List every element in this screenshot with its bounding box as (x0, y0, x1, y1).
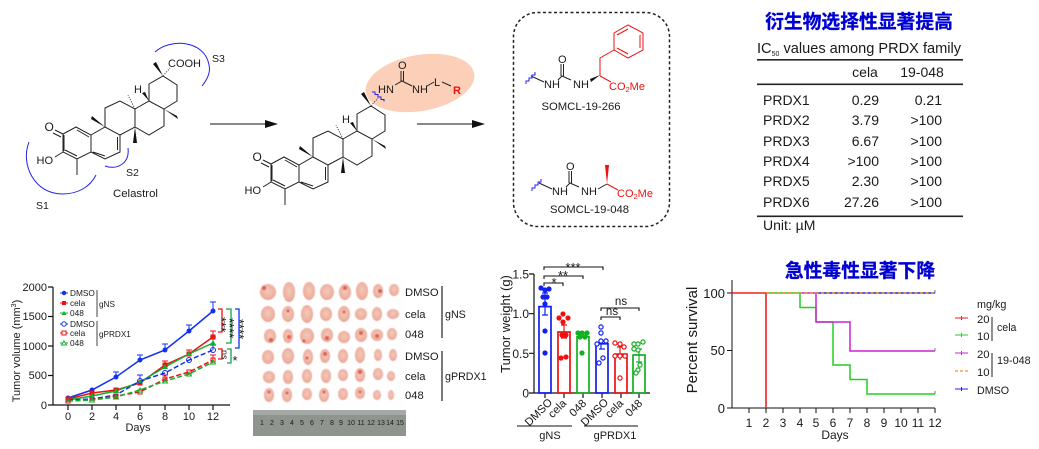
legend: gNS (99, 300, 115, 309)
tumors row: gPRDX1 DMSO (262, 347, 397, 365)
celastrol structure: S2 (126, 167, 139, 179)
tumor volume chart: * (232, 353, 238, 368)
legend: DMSO (977, 385, 1009, 397)
title: acute toxicity: 急性毒性显著下降 (785, 259, 935, 281)
legend: DMSO (70, 288, 95, 298)
IC50 table: cela (852, 64, 878, 80)
table rows: PRDX5 (763, 173, 810, 189)
row labels: DMSO (405, 351, 439, 363)
series lines (68, 311, 213, 398)
unit note: Unit: µM (763, 217, 815, 233)
tumors row: gPRDX1 cela (263, 368, 395, 384)
tumor volume chart: 1000 (23, 341, 47, 353)
tumor weight chart: gPRDX1 (594, 430, 636, 442)
IC50 table: 19-048 (900, 64, 944, 80)
survival chart: 5 (813, 416, 820, 430)
survival chart: 4 (797, 416, 804, 430)
legend: mg/kg (977, 299, 1006, 311)
tumor volume chart: *** (214, 317, 229, 332)
compound SOMCL-19-048: SOMCL-19-048 (550, 204, 629, 216)
ruler: 9 (339, 420, 343, 427)
celastrol structure: S3 (212, 53, 225, 65)
survival chart: Percent survival (684, 287, 701, 393)
category labels: cela (546, 397, 570, 421)
table rows: PRDX6 (763, 194, 810, 210)
row labels: gPRDX1 (445, 371, 487, 383)
row labels: gNS (445, 309, 466, 321)
celastrol structure (26, 43, 225, 212)
tumor surface blotches (262, 286, 382, 394)
category labels: 048 (567, 398, 589, 419)
tumor weight chart: ns (606, 306, 618, 318)
table rows: 6.67 (852, 133, 879, 149)
legend (955, 299, 1031, 397)
celastrol structure: HO (36, 155, 53, 167)
survival chart: 100 (703, 286, 725, 301)
legend: 10 (977, 331, 990, 343)
compound SOMCL-19-266: CO (609, 81, 626, 93)
urea-modified structure: R (453, 85, 461, 97)
legend: 10 (977, 367, 990, 379)
row labels: 048 (405, 329, 424, 341)
table header: values among PRDX family (779, 41, 962, 57)
tumor weight chart: 1.5 (512, 268, 529, 282)
category labels: 048 (623, 398, 645, 419)
tumor volume chart: 3 (11, 303, 18, 307)
legend: DMSO (70, 319, 95, 329)
survival chart: 11 (912, 416, 925, 430)
row labels: cela (405, 309, 426, 321)
tumor weight chart: * (551, 275, 557, 290)
urea-modified structure: O (252, 150, 262, 164)
significance brackets (544, 267, 639, 320)
tumor weight chart: 1.0 (512, 307, 529, 321)
ruler (253, 410, 406, 436)
markers (66, 308, 216, 400)
legend: 20 (977, 314, 990, 326)
tumor weight chart: gNS (539, 430, 561, 442)
celastrol structure: S1 (36, 200, 49, 212)
compound SOMCL-19-266: Me (630, 81, 645, 93)
table rows: 3.79 (852, 112, 879, 128)
tumors row: gNS cela (261, 305, 399, 323)
compound SOMCL-19-048: NH (581, 186, 597, 198)
ruler: 5 (300, 420, 304, 427)
tumor volume chart: 2 (89, 411, 95, 423)
survival curves (766, 293, 935, 394)
category labels: DMSO (579, 396, 611, 429)
significance brackets (218, 309, 239, 363)
compound SOMCL-19-048: 2 (634, 192, 638, 201)
legend: 048 (70, 338, 84, 348)
legend: 20 (977, 349, 990, 361)
ruler: 4 (290, 420, 294, 427)
compound SOMCL-19-048 (532, 161, 653, 216)
table rows: 0.21 (915, 92, 942, 108)
tumor volume chart: ns (220, 350, 230, 360)
ruler: 13 (377, 420, 385, 427)
tumor weight chart: 0.5 (512, 347, 529, 361)
tumor weight chart: Tumor weight (g) (498, 275, 513, 373)
survival chart: 7 (847, 416, 854, 430)
survival chart: 12 (928, 416, 942, 430)
legend (60, 288, 131, 348)
error bars (542, 293, 605, 349)
ruler: 15 (396, 420, 404, 427)
compound SOMCL-19-048: Me (638, 188, 653, 200)
table header: 50 (772, 51, 779, 58)
IC50 table (757, 41, 963, 233)
table rows: 0.29 (852, 92, 879, 108)
row labels (405, 286, 487, 402)
urea-modified structure: L (434, 77, 440, 89)
table rows (763, 92, 942, 210)
compound SOMCL-19-266 (526, 25, 645, 113)
legend: cela (70, 298, 86, 308)
bars (539, 307, 645, 393)
survival chart: 8 (864, 416, 871, 430)
row labels: 048 (405, 390, 424, 402)
survival chart (684, 280, 1031, 442)
table rows: >100 (910, 133, 942, 149)
tumor volume chart: **** (222, 318, 237, 338)
legend: gPRDX1 (99, 330, 131, 339)
tumor volume chart: ) (11, 300, 23, 303)
row labels: DMSO (405, 287, 439, 299)
tumor volume chart: 6 (137, 411, 143, 423)
data points (538, 285, 552, 356)
survival chart: 6 (830, 416, 837, 430)
urea-modified structure: O (398, 60, 407, 72)
urea-modified structure: H (342, 114, 350, 126)
tumor volume chart (11, 282, 247, 434)
compound SOMCL-19-266: NH (544, 79, 560, 91)
compound SOMCL-19-266: SOMCL-19-266 (541, 101, 621, 113)
ruler: 2 (270, 420, 274, 427)
legend: cela (70, 328, 86, 338)
tumors row: gNS 048 (264, 328, 397, 344)
tumor volume chart: 10 (183, 411, 195, 423)
legend: 048 (70, 308, 84, 318)
highlight ellipse (361, 46, 479, 120)
ruler: 3 (280, 420, 284, 427)
table rows: PRDX3 (763, 133, 810, 149)
ruler: 11 (357, 420, 365, 427)
table rows: >100 (910, 153, 942, 169)
tumor volume chart: 0 (65, 411, 71, 423)
compound SOMCL-19-266: 2 (626, 85, 630, 94)
tumor weight chart: 0 (522, 386, 529, 400)
ruler: 14 (386, 420, 394, 427)
table rows: >100 (910, 194, 942, 210)
table rows: >100 (910, 112, 942, 128)
survival chart: 10 (894, 416, 908, 430)
tumor volume chart: 500 (29, 370, 47, 382)
tumor weight chart: ns (615, 296, 627, 308)
tumors row: gPRDX1 048 (264, 387, 394, 402)
celastrol structure: Celastrol (113, 188, 158, 200)
ruler: 10 (347, 420, 355, 427)
tumor volume chart: Tumor volume (mm (11, 307, 23, 402)
arrow 1 (210, 120, 278, 128)
legend: 19-048 (997, 355, 1031, 367)
title: selectivity: 衍生物选择性显著提高 (765, 10, 953, 32)
ruler: 1 (260, 420, 264, 427)
row labels: cela (405, 371, 426, 383)
tumor volume chart: **** (232, 319, 247, 339)
category labels: cela (603, 397, 627, 421)
survival chart: 50 (711, 343, 725, 358)
compound SOMCL-19-266: O (558, 54, 567, 66)
ruler: 7 (320, 420, 324, 427)
compound SOMCL-19-048: NH (552, 186, 568, 198)
table rows: PRDX1 (763, 92, 810, 108)
dashed compound box (514, 12, 670, 226)
tumor weight chart (498, 260, 650, 442)
tumor volume chart: Days (125, 422, 151, 434)
survival chart: 3 (780, 416, 787, 430)
survival chart: 2 (763, 416, 770, 430)
site arcs (26, 43, 209, 194)
table rows: 2.30 (852, 173, 879, 189)
celastrol structure: O (44, 120, 54, 134)
tumor weight chart: ** (558, 268, 568, 283)
table rows: >100 (847, 153, 879, 169)
tumor volume chart: 1500 (23, 311, 47, 323)
compound SOMCL-19-266: NH (573, 79, 589, 91)
urea-modified structure: HN (378, 84, 394, 96)
axes (529, 274, 650, 398)
error bars (113, 302, 216, 377)
tumor volume chart: 2000 (23, 282, 47, 294)
urea-modified structure: NH (412, 84, 428, 96)
survival chart: 9 (881, 416, 888, 430)
survival chart: 0 (718, 401, 725, 416)
tumor volume chart: 8 (162, 411, 168, 423)
table rows: >100 (910, 173, 942, 189)
table header: IC (757, 41, 772, 57)
tumor weight chart: *** (565, 260, 581, 275)
celastrol structure: COOH (168, 58, 201, 70)
arrow 2 (417, 120, 485, 128)
tumors row: gNS DMSO (260, 282, 399, 302)
tumor volume chart: 0 (41, 400, 47, 412)
axes (727, 280, 935, 413)
ruler: 8 (330, 420, 334, 427)
ruler: 12 (367, 420, 375, 427)
axes (48, 287, 230, 410)
tumor volume chart: 12 (207, 411, 219, 423)
survival chart: Days (821, 428, 849, 442)
urea-modified structure (244, 46, 479, 205)
category labels: DMSO (523, 396, 555, 429)
table rows: PRDX4 (763, 153, 810, 169)
table rows: PRDX2 (763, 112, 810, 128)
survival chart: 1 (746, 416, 753, 430)
compound SOMCL-19-048: O (566, 161, 575, 173)
tumor volume chart: 4 (113, 411, 119, 423)
legend: cela (997, 322, 1017, 334)
urea-modified structure: HO (244, 185, 261, 197)
ruler: 6 (310, 420, 314, 427)
celastrol structure: H (134, 84, 142, 96)
tumor photo (253, 277, 487, 436)
table rows: 27.26 (844, 194, 879, 210)
category labels (523, 396, 645, 429)
compound SOMCL-19-048: CO (617, 188, 634, 200)
